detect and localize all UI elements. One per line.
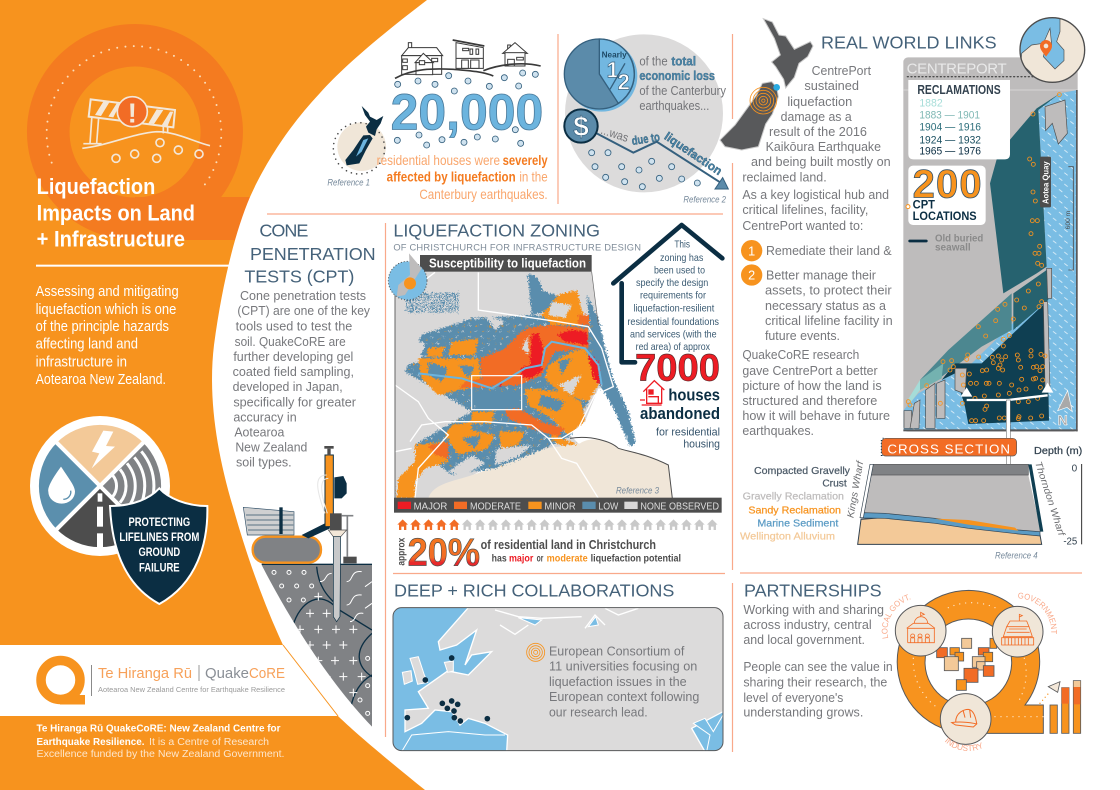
icon: shield with text: GROUND xyxy=(138,545,180,559)
footer note xyxy=(36,724,284,760)
chart: house pictogram row xyxy=(397,519,718,530)
intro text: liquefaction which is one xyxy=(36,302,176,318)
labels: soil layers: Compacted Gravelly xyxy=(754,466,851,477)
legend: reclamations: 1904 — 1916 xyxy=(919,122,981,134)
text: due to liquefaction: liquefaction xyxy=(662,129,725,178)
logo wordmark: Aotearoa New Zealand Centre for Earthquake Resilience xyxy=(98,687,285,694)
list: CentrePort goals: assets, to protect their xyxy=(765,282,892,297)
statistic: 200 CPT locations: CPT xyxy=(913,197,936,211)
icon: shield with text: FAILURE xyxy=(139,561,180,575)
reference 3: Reference 3 xyxy=(616,485,659,495)
legend: reclamations: 1882 xyxy=(919,98,943,110)
statistic: approx 20%: approx xyxy=(396,537,407,566)
text: total economic loss: of the xyxy=(639,54,668,69)
text: houses affected xyxy=(377,152,548,202)
map markers: universities xyxy=(404,655,490,724)
text: CPT description: soil types. xyxy=(236,455,292,470)
labels: soil layers: Wellington Alluvium xyxy=(740,532,835,543)
intro text: infrastructure in xyxy=(36,355,127,371)
text: CPT description: New Zealand xyxy=(235,440,307,455)
icon: houses on a hill xyxy=(395,40,541,78)
list: CentrePort goals: necessary status as a xyxy=(765,298,887,313)
heading: zoning xyxy=(393,221,641,253)
text: research outcome: QuakeCoRE research xyxy=(742,347,859,362)
icon: shield with text xyxy=(110,488,207,604)
text: CPT description: tools used to test the xyxy=(236,319,352,334)
text: research outcome: earthquakes. xyxy=(742,423,814,438)
legend: reclamations xyxy=(908,80,1010,159)
list: CentrePort goals: critical lifeline facility in xyxy=(765,313,893,328)
icon: Q partnership ring xyxy=(897,590,1043,733)
text: CentrePort story: critical lifelines, facility, xyxy=(742,202,868,217)
labels: soil layers: Crust xyxy=(822,479,847,490)
text: due to liquefaction xyxy=(599,123,725,178)
label: Aotea Quay: Aotea Quay xyxy=(1041,161,1051,204)
icon: collaboration squares xyxy=(937,638,997,690)
text: due to liquefaction: ...was xyxy=(599,123,630,145)
text: zoning use: red area) of approx xyxy=(636,342,711,353)
intro text: of the principle hazards xyxy=(36,319,169,335)
text: CentrePort story: CentrePort xyxy=(812,63,871,78)
text: CentrePort story: As a key logistical hub and xyxy=(742,187,889,202)
panel: deep + rich collaborations xyxy=(393,581,723,752)
text: CentrePort story: result of the 2016 xyxy=(769,124,867,139)
text: houses affected: residential houses were xyxy=(377,152,500,168)
list: CentrePort goals: Remediate their land & xyxy=(766,243,892,258)
icon: liquefaction bubbles xyxy=(394,70,538,148)
heading: CPT: PENETRATION xyxy=(250,244,376,264)
icon: road barrier over liquefaction: ! xyxy=(128,98,137,129)
axis: depth: Depth (m) xyxy=(1034,446,1082,457)
text: houses abandoned: housing xyxy=(683,439,720,451)
text: CentrePort story xyxy=(742,63,891,233)
legend: old buried seawall xyxy=(910,234,983,254)
text: European Consortium: our research lead. xyxy=(549,704,648,719)
legend: reclamations: 1965 — 1976 xyxy=(919,146,981,158)
text: CPT description xyxy=(233,288,370,470)
number: 20,000: 20,000 xyxy=(391,83,543,140)
text: CPT description: specifically for greater xyxy=(233,395,357,410)
text: CPT description: accuracy in xyxy=(233,410,297,425)
icon: local government xyxy=(895,605,946,656)
text: total economic loss: economic loss xyxy=(639,68,715,83)
heading: CPT: CONE xyxy=(259,221,308,241)
text: CPT description: coated field sampling, xyxy=(233,364,354,379)
label: cross section xyxy=(882,438,1017,464)
text: total economic loss: earthquakes... xyxy=(639,98,709,113)
map title bar: Susceptibility to liquefaction xyxy=(429,257,586,271)
legend: reclamations: 1924 — 1932 xyxy=(919,135,981,147)
text: houses abandoned: abandoned xyxy=(640,404,720,423)
statistic: 200 CPT locations: 200 xyxy=(913,162,982,206)
text: partnerships: understanding grows. xyxy=(743,705,863,720)
icon: shield with text: PROTECTING xyxy=(128,515,190,529)
text: partnerships: level of everyone's xyxy=(743,690,844,705)
text: total economic loss: total xyxy=(671,54,696,69)
chart: nearly half pie: 1 xyxy=(607,57,619,82)
text: zoning use: requirements for xyxy=(640,290,706,301)
text: due to liquefaction: due to xyxy=(631,130,661,148)
legend: MODERATE xyxy=(470,502,521,513)
text: CPT description: Cone penetration tests xyxy=(240,288,366,303)
legend: LOW xyxy=(598,502,619,513)
text: CPT description: soil. QuakeCoRE are xyxy=(235,334,346,349)
map: Europe xyxy=(393,608,723,752)
text: partnerships: sharing their research, the xyxy=(743,675,887,690)
chart: nearly half pie: 2 xyxy=(618,69,630,94)
statistic: approx 20%: liquefaction potential xyxy=(591,554,681,565)
icon: liquefaction bubbles xyxy=(589,150,700,190)
logo wordmark: Quake xyxy=(205,666,249,682)
illustration: CPT drill rig and soil layers xyxy=(243,446,372,727)
intro text: affecting land and xyxy=(36,337,138,353)
reference 4: Reference 4 xyxy=(995,550,1038,560)
scale bracket: 600 m xyxy=(1065,167,1073,270)
chart: growth bars xyxy=(1040,681,1081,733)
arrow: section line xyxy=(961,383,1053,440)
text: houses affected: affected by liquefaction xyxy=(387,169,516,185)
text: partnerships: Working with and sharing xyxy=(743,602,884,617)
text: CentrePort story: CentrePort wanted to: xyxy=(742,218,863,233)
text: European Consortium: European context following xyxy=(549,689,699,704)
axis: depth: -25 xyxy=(1063,536,1078,547)
text: CPT description: Aotearoa xyxy=(234,425,285,440)
legend: MAJOR xyxy=(414,502,447,513)
panel: 20,000 houses xyxy=(327,34,728,204)
labels: wharves xyxy=(845,459,1067,539)
text: CentrePort story: sustained xyxy=(804,78,859,93)
icon: north arrow xyxy=(1058,391,1072,428)
legend: reclamations: RECLAMATIONS xyxy=(917,83,1001,97)
title xyxy=(37,174,195,252)
text: CentrePort story: reclaimed land. xyxy=(742,170,827,185)
text: research outcome xyxy=(742,347,890,438)
text: houses affected: in the xyxy=(519,169,548,185)
text: zoning use: residential foundations xyxy=(627,317,719,328)
map: CentrePort xyxy=(903,17,1087,440)
scale bracket: 600 m: 600 m xyxy=(1065,210,1072,229)
label: local govt: LOCAL GOVT. xyxy=(882,594,910,639)
text: zoning use: specify the design xyxy=(636,278,709,289)
icon: locator globe xyxy=(388,253,427,300)
text: research outcome: how it will behave in future xyxy=(742,408,890,423)
chart: ground section xyxy=(858,464,1043,544)
legend: MINOR xyxy=(544,502,576,513)
list: CentrePort goals: 1 xyxy=(748,244,755,258)
heading: collaborations: DEEP + RICH COLLABORATIONS xyxy=(394,581,674,601)
map: harbour water xyxy=(904,90,1077,431)
large Q watermark xyxy=(27,24,265,240)
logo mark xyxy=(41,660,85,704)
panel: lifelines, logo, drill xyxy=(30,416,372,727)
number: 7000: 7000 xyxy=(635,348,720,390)
text: European Consortium: European Consortium of xyxy=(549,644,685,659)
text: houses abandoned: for residential xyxy=(656,427,720,439)
title: + Infrastructure xyxy=(37,227,185,252)
chart: nearly half pie: Nearly xyxy=(602,50,627,60)
list: CentrePort goals: 2 xyxy=(748,269,755,283)
text: CPT description: further developing gel xyxy=(233,349,353,364)
logo wordmark xyxy=(98,665,285,694)
heading: CPT xyxy=(244,221,376,286)
title: Impacts on Land xyxy=(37,201,195,226)
CPT location markers xyxy=(906,93,1061,423)
text: zoning use: and services (with the xyxy=(630,330,717,341)
footer note: Earthquake Resilience. xyxy=(36,737,145,748)
list: CentrePort goals: future events. xyxy=(765,328,840,343)
legend: NONE OBSERVED xyxy=(640,502,719,513)
text: European Consortium: 11 universities focusing on xyxy=(549,659,697,674)
text: houses affected: severely xyxy=(503,152,548,168)
text: zoning use: liquefaction-resilient xyxy=(633,304,714,315)
text: zoning use: This xyxy=(674,240,690,251)
text: research outcome: structured and therefore xyxy=(742,393,877,408)
text: partnerships xyxy=(743,602,893,720)
text: European Consortium: liquefaction issues in the xyxy=(549,674,687,689)
reference 2: Reference 2 xyxy=(683,194,726,204)
legend xyxy=(394,498,722,513)
logo wordmark: Te Hiranga Rū xyxy=(98,666,192,682)
text: CPT description: developed in Japan, xyxy=(233,379,343,394)
statistic: approx 20%: has xyxy=(492,554,507,565)
icon: falling arrow with dollar: $ xyxy=(573,111,589,142)
panel: real world links xyxy=(720,17,1087,440)
icon: road barrier over liquefaction xyxy=(47,46,221,191)
panel: cone penetration tests xyxy=(233,221,376,470)
heading: real world links: REAL WORLD LINKS xyxy=(821,32,997,52)
text: houses abandoned xyxy=(640,386,720,451)
labels: soil layers xyxy=(740,466,851,543)
text: CentrePort story: liquefaction xyxy=(787,94,852,109)
statistic: 200 CPT locations xyxy=(906,162,986,225)
list: CentrePort goals: Better manage their xyxy=(766,267,877,282)
legend: reclamations: 1883 — 1901 xyxy=(919,110,980,122)
intro text: Assessing and mitigating xyxy=(36,284,179,300)
icon: concentric target xyxy=(527,643,545,661)
text: zoning use xyxy=(627,240,719,353)
icon: abandoned house xyxy=(640,381,664,405)
icon: NZ locator xyxy=(333,106,386,174)
footer note: Excellence funded by the New Zealand Government. xyxy=(36,749,284,760)
text: partnerships: and local government. xyxy=(743,632,865,647)
panel: liquefaction zoning xyxy=(388,221,722,575)
icon: zoning house callout xyxy=(613,225,722,362)
heading: zoning: LIQUEFACTION ZONING xyxy=(393,221,600,241)
reference 1: Reference 1 xyxy=(327,178,370,188)
icon: north arrow: N xyxy=(1058,412,1068,428)
title: Liquefaction xyxy=(37,174,155,199)
statistic: approx 20%: major xyxy=(509,554,534,565)
heading: CPT: TESTS (CPT) xyxy=(244,266,354,286)
panel: title and intro xyxy=(36,46,230,388)
icon: lifelines wheel xyxy=(30,416,170,556)
labels: wharves: Thorndon Wharf xyxy=(1032,460,1067,539)
chart: nearly half pie xyxy=(564,39,637,112)
statistic: approx 20%: or xyxy=(537,554,543,565)
label: government: GOVERNMENT xyxy=(1018,592,1057,634)
logo wordmark: CoRE xyxy=(249,666,285,682)
axis: depth: 0 xyxy=(1072,464,1078,475)
intro text xyxy=(36,284,179,388)
text: total economic loss xyxy=(639,54,726,113)
icon: industry hard hat xyxy=(940,694,991,744)
labels: soil layers: Marine Sediment xyxy=(757,519,838,530)
text: total economic loss: of the Canterbury xyxy=(639,83,726,98)
legend: old buried seawall: Old buried xyxy=(935,234,983,245)
footer note: Te Hiranga Rū QuakeCoRE: New Zealand Centre for xyxy=(36,724,281,734)
text: research outcome: gave CentrePort a better xyxy=(742,363,878,378)
icon: shield with text: LIFELINES FROM xyxy=(119,530,199,544)
labels: wharves: Kings Wharf xyxy=(845,459,866,519)
legend: old buried seawall: seawall xyxy=(935,243,971,254)
text: research outcome: picture of how the land is xyxy=(742,378,882,393)
labels: soil layers: Gravelly Reclamation xyxy=(743,492,844,503)
statistic: approx 20% xyxy=(396,532,681,575)
labels: soil layers: Sandy Reclamation xyxy=(748,505,841,516)
text: CentrePort story: damage as a xyxy=(781,109,852,124)
label: industry: INDUSTRY xyxy=(945,738,982,751)
intro text: Aotearoa New Zealand. xyxy=(36,372,166,388)
text: houses abandoned: houses xyxy=(668,386,720,405)
statistic: 200 CPT locations: LOCATIONS xyxy=(913,209,977,223)
label: cross section: CROSS SECTION xyxy=(887,441,1010,456)
text: houses affected: Canterbury earthquakes. xyxy=(419,186,548,202)
text: partnerships: People can see the value in xyxy=(743,659,893,674)
divider lines xyxy=(267,34,1082,752)
panel: cross section xyxy=(740,438,1082,560)
text: CPT description: (CPT) are one of the key xyxy=(237,303,370,318)
heading: partnerships: PARTNERSHIPS xyxy=(744,581,882,601)
statistic: approx 20%: 20% xyxy=(408,532,480,575)
list: CentrePort goals xyxy=(741,240,893,343)
icon: NZ with epicentre xyxy=(720,19,813,150)
footer note: It is a Centre of Research xyxy=(149,737,269,748)
panel: economic loss xyxy=(564,34,728,204)
icon: falling arrow with dollar xyxy=(564,109,728,189)
heading: zoning: OF CHRISTCHURCH FOR INFRASTRUCTURE DESIGN xyxy=(393,243,641,253)
text: CentrePort story: and being built mostly on xyxy=(751,154,891,169)
icon: government building xyxy=(992,606,1043,657)
map: susceptibility to liquefaction xyxy=(395,272,672,498)
text: partnerships: across industry, central xyxy=(743,617,872,632)
text: zoning use: been used to xyxy=(654,265,705,276)
statistic: approx 20%: moderate xyxy=(547,554,588,565)
text: European Consortium xyxy=(549,644,699,719)
axis: depth xyxy=(1034,446,1082,547)
statistic: approx 20%: of residential land in Christchurch xyxy=(481,538,656,552)
text: zoning use: zoning has xyxy=(660,253,703,264)
map title: CENTREPORT xyxy=(907,60,1007,77)
text: CentrePort story: Kaikōura Earthquake xyxy=(766,139,881,154)
panel: partnerships xyxy=(743,581,1082,751)
icon: Wellington harbour locator globe xyxy=(1020,17,1087,84)
panel: logo band xyxy=(0,645,338,716)
